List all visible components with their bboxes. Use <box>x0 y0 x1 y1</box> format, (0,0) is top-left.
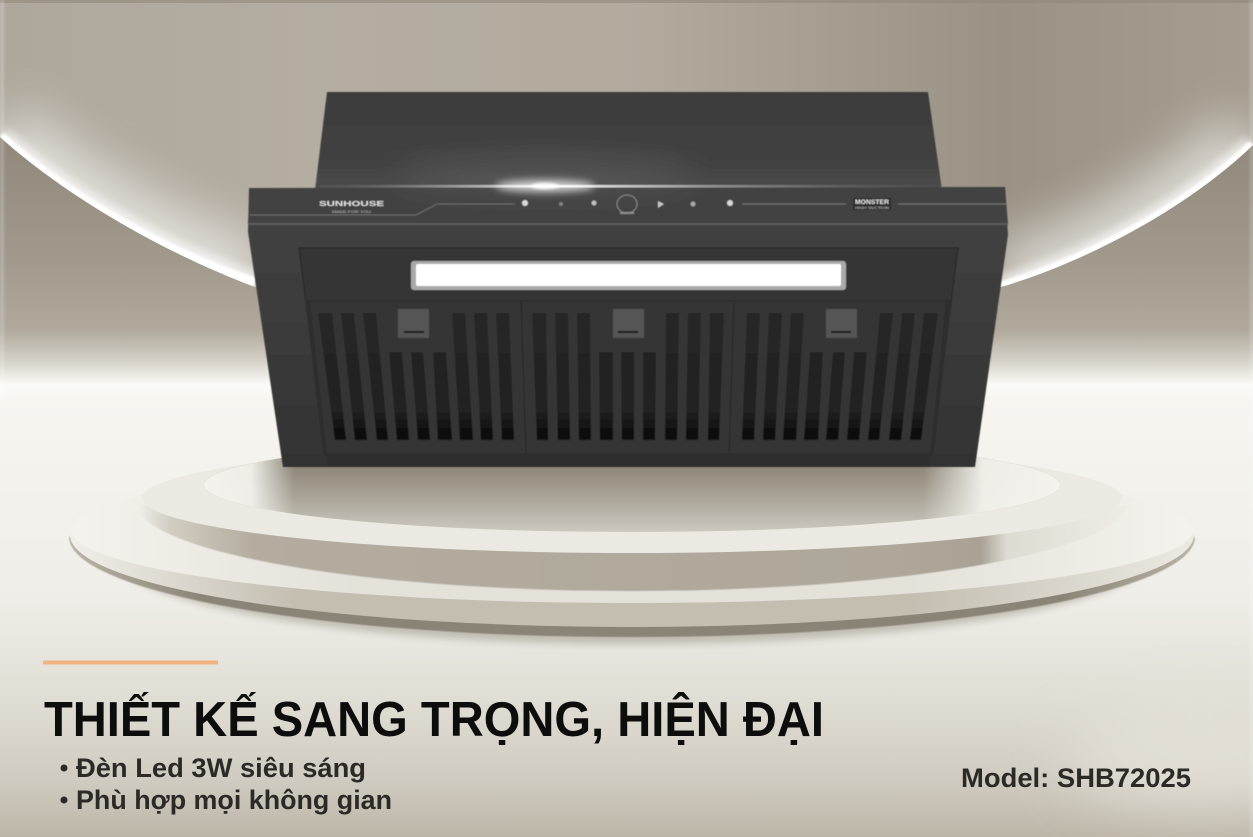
model number: Model: SHB72025 <box>961 763 1191 793</box>
range hood <box>248 92 1008 467</box>
hood: right trim line <box>742 203 1006 205</box>
hood: main body <box>248 187 1008 467</box>
accent line <box>43 660 218 664</box>
bullet list <box>60 753 392 815</box>
title: THIẾT KẾ SANG TRỌNG, HIỆN ĐẠI <box>44 692 824 747</box>
stepped round podium <box>69 438 1195 644</box>
hood: vent latches <box>398 309 857 338</box>
hood: touch controls <box>522 195 733 214</box>
podium: base tier upper surface <box>71 457 1193 603</box>
hood: Monster badge: HIGH SUCTION <box>855 205 889 210</box>
hood: Monster badge <box>853 198 891 210</box>
podium: top surface <box>204 438 1060 532</box>
bullet: space: Phù hợp mọi không gian <box>76 785 392 815</box>
hood: vent divider lines <box>305 300 951 453</box>
hood: Sunhouse logo: SUNHOUSE <box>319 199 384 208</box>
hood: left trim line <box>250 204 515 215</box>
curved dome backdrop with glowing edge <box>0 0 1253 300</box>
podium: lit sides of top surface <box>204 438 1060 532</box>
hood: right vent slats <box>742 313 938 440</box>
hood: control strip <box>248 187 1008 224</box>
podium: base tier wall <box>70 535 1194 627</box>
hood: Sunhouse logo <box>319 199 384 214</box>
hood: inner recess <box>299 248 958 455</box>
hood: rear panel <box>315 92 942 190</box>
hood: centre vent slats <box>532 313 724 440</box>
hood: left vent slats <box>318 313 514 440</box>
podium: middle tier wall <box>135 505 1128 591</box>
hood: lower lip <box>326 453 931 467</box>
bullet: LED: Đèn Led 3W siêu sáng <box>76 753 366 783</box>
hood: LED light bar <box>411 261 846 290</box>
hood: Sunhouse logo: MADE FOR YOU <box>332 209 371 214</box>
hood: Monster badge: MONSTER <box>855 200 890 206</box>
hood: light flare on top edge <box>320 156 940 192</box>
podium: middle tier rim <box>142 443 1122 553</box>
podium: cast shadow <box>110 552 1155 644</box>
podium: base tier dark rim <box>69 537 1195 637</box>
